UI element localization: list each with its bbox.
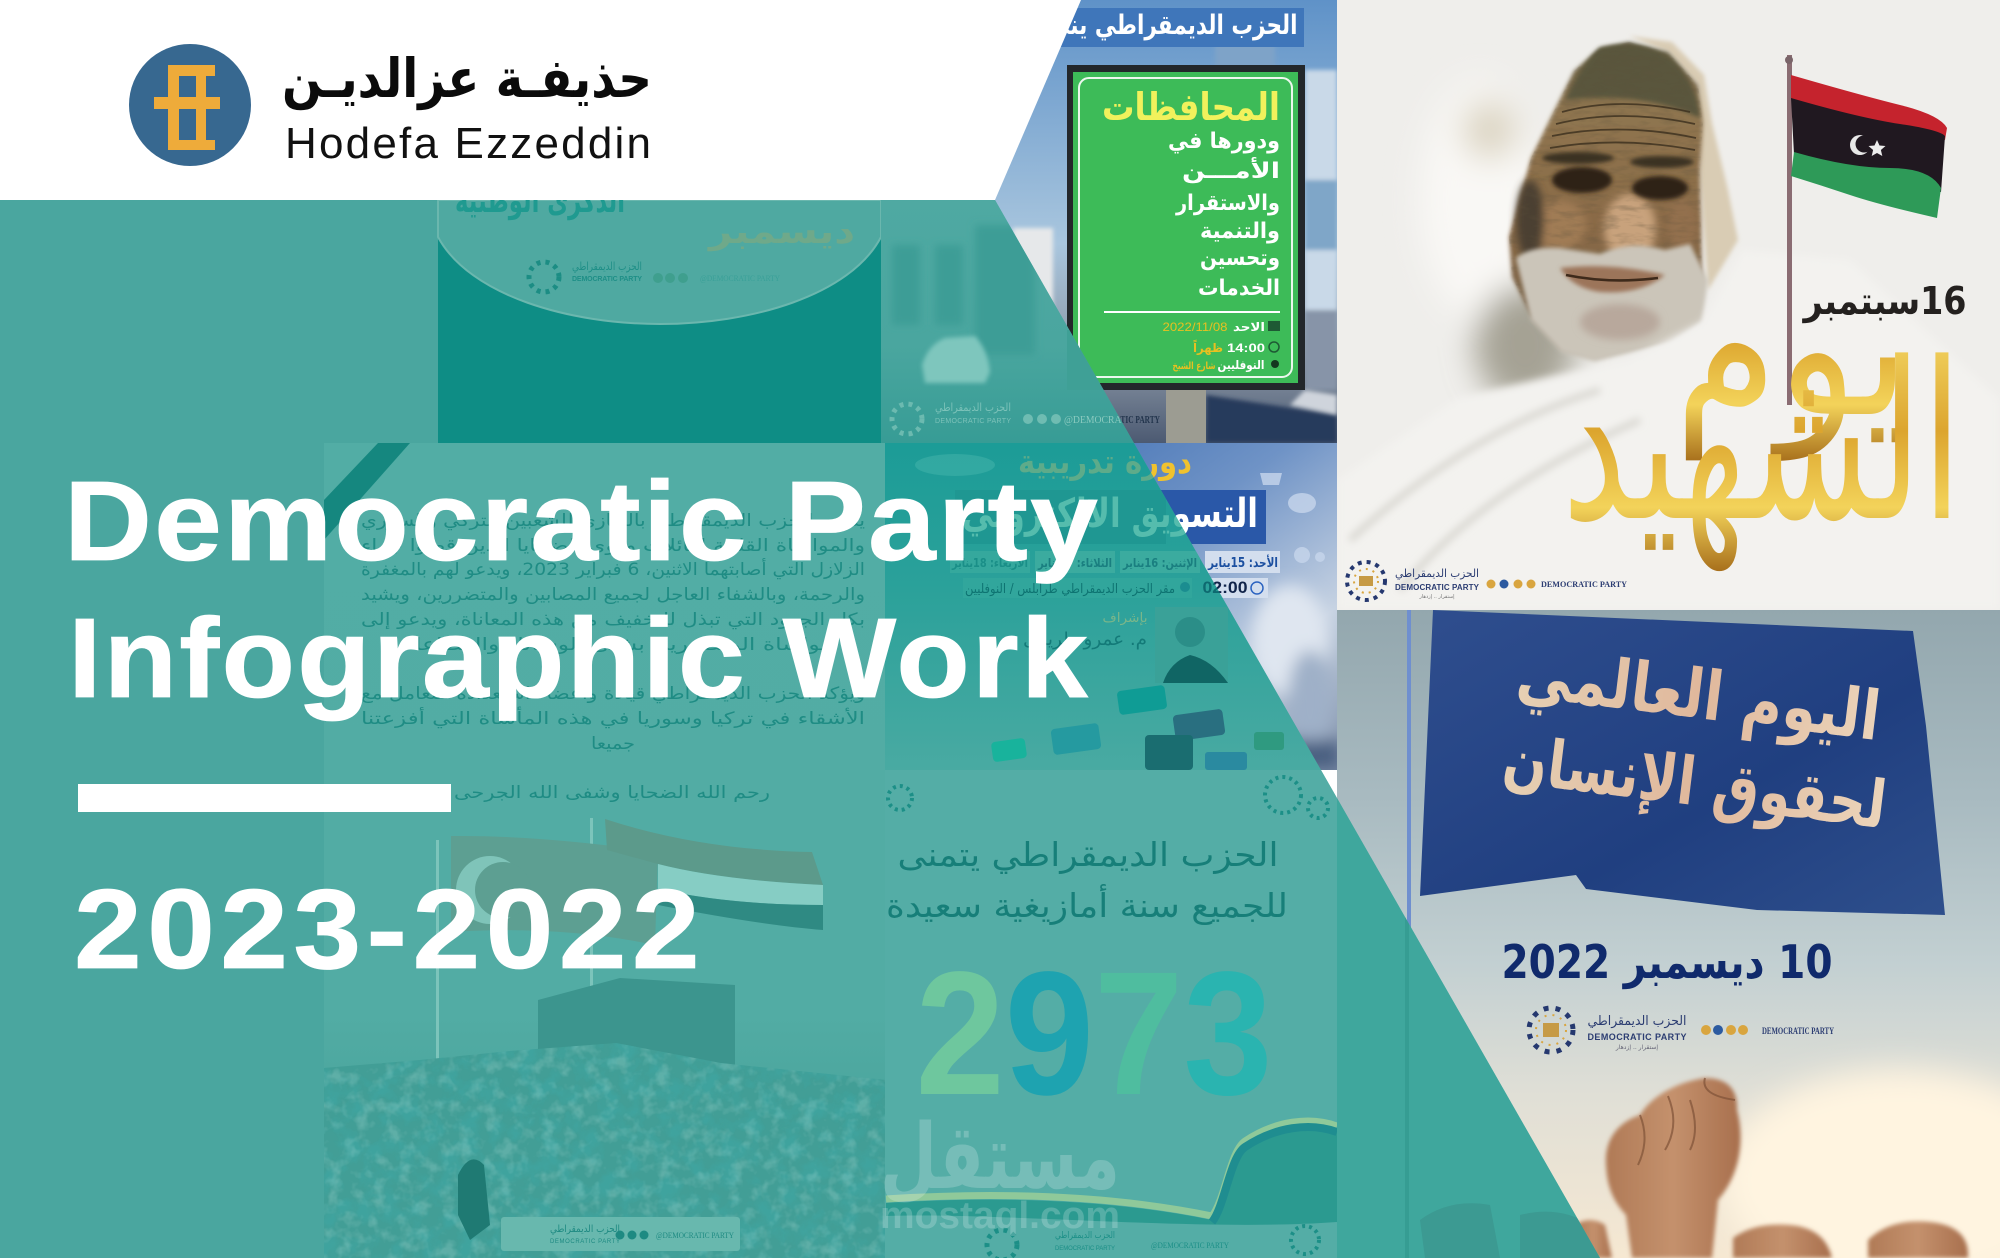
ghost: billboard poster — [881, 200, 1337, 443]
party footer logo: DEMOCRATIC PARTY — [1541, 580, 1627, 589]
sign event details: 14:00 — [1227, 341, 1265, 355]
ghost year number: 2973 — [916, 936, 1272, 1132]
eyes and brows — [1542, 152, 1694, 200]
ghost decorative stars — [888, 777, 1328, 1254]
party footer logo: DEMOCRATIC PARTY — [1588, 1032, 1686, 1042]
party footer logo: إستقرار .. إزدهار — [1418, 594, 1455, 600]
raised fists — [1575, 1078, 1968, 1258]
main title — [64, 458, 1100, 721]
ghosted posters under the teal panel — [324, 181, 1617, 1258]
billboard sign — [1067, 65, 1305, 390]
main title: Democratic Party — [64, 458, 1100, 584]
sign event details: الاحد — [1233, 320, 1265, 334]
poster: governorates forum billboard — [995, 0, 1337, 443]
cap — [1565, 45, 1700, 118]
ghost: December poster: @DEMOCRATIC PARTY — [700, 274, 780, 283]
heading: training course: دورة تدريبية — [1018, 442, 1192, 482]
ghost app icons — [991, 685, 1284, 770]
ghost: 2973 Amazigh new year poster: DEMOCRATIC PARTY — [1055, 1246, 1115, 1252]
year range: 2023-2022 — [74, 866, 705, 992]
ghost: earthquake condolence poster: ويؤكد الحزب الديمقراطي قيادة وأعضاء استعداده للتعامل مع — [361, 682, 865, 704]
sign event details: ظهراً — [1193, 339, 1223, 355]
flag text line 2: لحقوق الإنسان — [1499, 721, 1890, 845]
ghost: human rights poster edge — [1337, 770, 1617, 1258]
sign body lines: والتنمية — [1200, 219, 1280, 244]
party footer logo: الحزب الديمقراطي — [1395, 567, 1479, 580]
poster: digital marketing training — [1134, 443, 1337, 770]
sign body lines: الأمـــن — [1182, 156, 1280, 184]
ghost: earthquake condolence poster: والرحمة، وبالشفاء العاجل لجميع المصابين والمتضررين، ويشيد — [361, 585, 865, 605]
billboard post — [1166, 388, 1206, 443]
logo disc — [129, 44, 251, 166]
flag text line 1: اليوم العالمي — [1513, 634, 1885, 757]
beard — [1516, 244, 1708, 362]
ghost: earthquake condolence poster: الزلازل التي أصابتهما الاثنين، 6 فبراير 2023، ويدعو لهم بالمغفرة — [361, 558, 865, 580]
main title: Infographic Work — [68, 595, 1090, 721]
ghost: training poster: الثلاثاء: 17يناير — [1037, 556, 1112, 570]
training icons — [1260, 473, 1325, 563]
title divider bar — [78, 784, 451, 812]
ghost: training poster — [885, 442, 1338, 770]
road — [1206, 395, 1337, 443]
logo monogram — [154, 65, 220, 150]
blue flag — [1420, 610, 1945, 915]
flagpole — [1787, 55, 1792, 405]
date: 10 December 2022: 10 ديسمبر 2022 — [1502, 935, 1832, 989]
ghost: earthquake condolence poster: الأشقاء في تركيا وسوريا في هذه المأساة التي أفزعتنا — [361, 706, 865, 729]
white shawl front — [1470, 316, 1704, 428]
ghost: earthquake condolence poster: مواساة المتضررين بشتى الوسائل والقطاعات — [393, 635, 833, 655]
sign body lines: ودورها في — [1168, 129, 1280, 154]
watermark: mostaql: mostaql.com — [880, 1195, 1120, 1237]
finger creases — [1638, 1078, 1735, 1165]
ghost: training poster: دورة تدريبية — [1018, 442, 1192, 482]
ghost flags — [436, 818, 823, 1070]
sign headline: المحافظات — [1102, 85, 1280, 129]
ghost: earthquake condolence poster — [324, 443, 886, 1258]
ghost: 2973 Amazigh new year poster: @DEMOCRATIC PARTY — [1151, 1241, 1229, 1250]
ghost: December poster: الحزب الديمقراطي — [572, 260, 642, 273]
ghost: training poster: الإثنين: 16يناير — [1122, 556, 1197, 570]
party footer logo — [1529, 1008, 1834, 1052]
party footer logo: الحزب الديمقراطي — [1588, 1014, 1686, 1029]
2973 tile edge — [1300, 770, 1337, 870]
sign event details: شارع الشيخ — [1172, 361, 1216, 372]
header banner: الحزب الديمقراطي ينظم — [1032, 10, 1298, 41]
shawl shading — [1420, 80, 1575, 405]
white header band — [0, 0, 1081, 200]
ghost: training poster: م. عمرو طريبيل — [1023, 629, 1147, 650]
ghost: training poster: 02:00 — [1202, 578, 1248, 597]
ghost: 2973 Amazigh new year poster — [885, 770, 1337, 1258]
ghost ribbon — [886, 1121, 1337, 1225]
ghost: training poster: بإشراف — [1102, 611, 1148, 626]
ghost: December poster — [438, 181, 881, 443]
ghost: December poster: DEMOCRATIC PARTY — [572, 276, 642, 283]
sign body lines: والاستقرار — [1175, 191, 1280, 216]
header banner — [1060, 8, 1304, 47]
ghost: billboard poster: DEMOCRATIC PARTY — [935, 418, 1011, 425]
ghost: training poster: الأربعاء: 18يناير — [951, 555, 1028, 570]
ghost: training poster: مقر الحزب الديمقراطي طرابلس / النوفليين — [965, 582, 1175, 597]
portrait of elder — [1500, 35, 1738, 362]
ghost greeting text: الحزب الديمقراطي يتمنى — [898, 835, 1278, 874]
hood — [1629, 36, 1738, 290]
Latin name: Hodefa Ezzeddin — [285, 119, 651, 168]
sign body lines: وتحسين — [1200, 246, 1280, 271]
skin texture — [1509, 42, 1703, 292]
ghost: billboard poster: @DEMOCRATIC — [1064, 415, 1136, 426]
ghost presenter — [1155, 607, 1228, 683]
watermark: mostaql — [880, 1105, 1120, 1237]
ghost: 2973 Amazigh new year poster: الحزب الديمقراطي — [1055, 1231, 1115, 1241]
ghost building and rubble: الحزب الديمقراطي — [550, 1224, 620, 1235]
ghost building and rubble: @DEMOCRATIC PARTY — [656, 1231, 734, 1240]
flagpole — [1407, 610, 1411, 927]
cloth folds — [1350, 390, 1640, 590]
party footer logo: DEMOCRATIC PARTY — [1395, 583, 1480, 592]
poster: International Human Rights Day — [1337, 610, 2000, 1258]
sign event details: 2022/11/08 — [1162, 320, 1228, 334]
time chip — [1211, 578, 1268, 598]
party footer logo — [1347, 562, 1627, 600]
ghost: 2973 Amazigh new year poster: للجميع سنة أمازيغية سعيدة — [886, 884, 1288, 925]
nose and cheeks — [1516, 180, 1696, 262]
course title: التسويق الالكتروني — [962, 491, 1258, 537]
ghost: December poster: الذكرى الوطنية — [455, 181, 625, 221]
schedule chip: الأحد: 15يناير — [1207, 554, 1278, 571]
ghost: training poster: التسويق الالكتروني — [962, 491, 1258, 537]
ghost: earthquake condolence poster: يتقدم الحزب الديمقراطي بالتعازي للشعبين التركي والسوري — [361, 511, 865, 531]
forehead wrinkles — [1550, 104, 1696, 150]
ghost: earthquake condolence poster: جميعا — [591, 734, 635, 754]
teal overlay panel — [0, 200, 1600, 1258]
gold calligraphy title: يوم — [1674, 235, 1910, 461]
poster: Martyrs' Day with Libyan flag — [1337, 0, 2000, 610]
sunlit glow — [1720, 1070, 2000, 1258]
ghost: earthquake condolence poster: رحم الله الضحايا وشفى الله الجرحى — [454, 783, 770, 803]
sign event details — [1162, 320, 1280, 373]
visible social handle: DEMOCRATIC PARTY — [1082, 415, 1161, 426]
party footer logo: DEMOCRATIC PARTY — [1762, 1026, 1834, 1036]
ghost: earthquake condolence poster: والمواساة القلبية لعائلات وذوي الضحايا الذين قضوا جراء — [361, 536, 865, 556]
ghost building and rubble: DEMOCRATIC PARTY — [550, 1239, 620, 1245]
party footer logo: إستقرار .. إزدهار — [1615, 1044, 1658, 1051]
ghost: billboard poster: الحزب الديمقراطي — [935, 401, 1011, 414]
sign event details: النوفليين — [1218, 358, 1264, 373]
time chip: 02:00 — [1202, 578, 1248, 597]
ghost: December poster: ديسمبر — [707, 212, 855, 252]
blurred highlights — [1250, 585, 1340, 770]
schedule chip — [1205, 551, 1280, 573]
Libyan flag — [1791, 75, 1947, 218]
title banner — [1161, 490, 1266, 544]
background buildings — [1013, 40, 1337, 390]
sign body lines: الخدمات — [1198, 276, 1280, 301]
logo: Hodefa Ezzeddin — [129, 44, 652, 168]
ghost: earthquake condolence poster: بكل الجهود التي تبذل للتخفيف من هذه المعاناة، ويدعو إلى — [361, 610, 865, 630]
Arabic name: حذيفـة عزالديـن — [282, 47, 652, 110]
sign body lines — [1168, 129, 1280, 301]
ghost building and rubble — [324, 978, 886, 1258]
watermark: mostaql: مستقل — [880, 1105, 1120, 1210]
date: 16 September: 16سبتمبر — [1802, 279, 1966, 323]
